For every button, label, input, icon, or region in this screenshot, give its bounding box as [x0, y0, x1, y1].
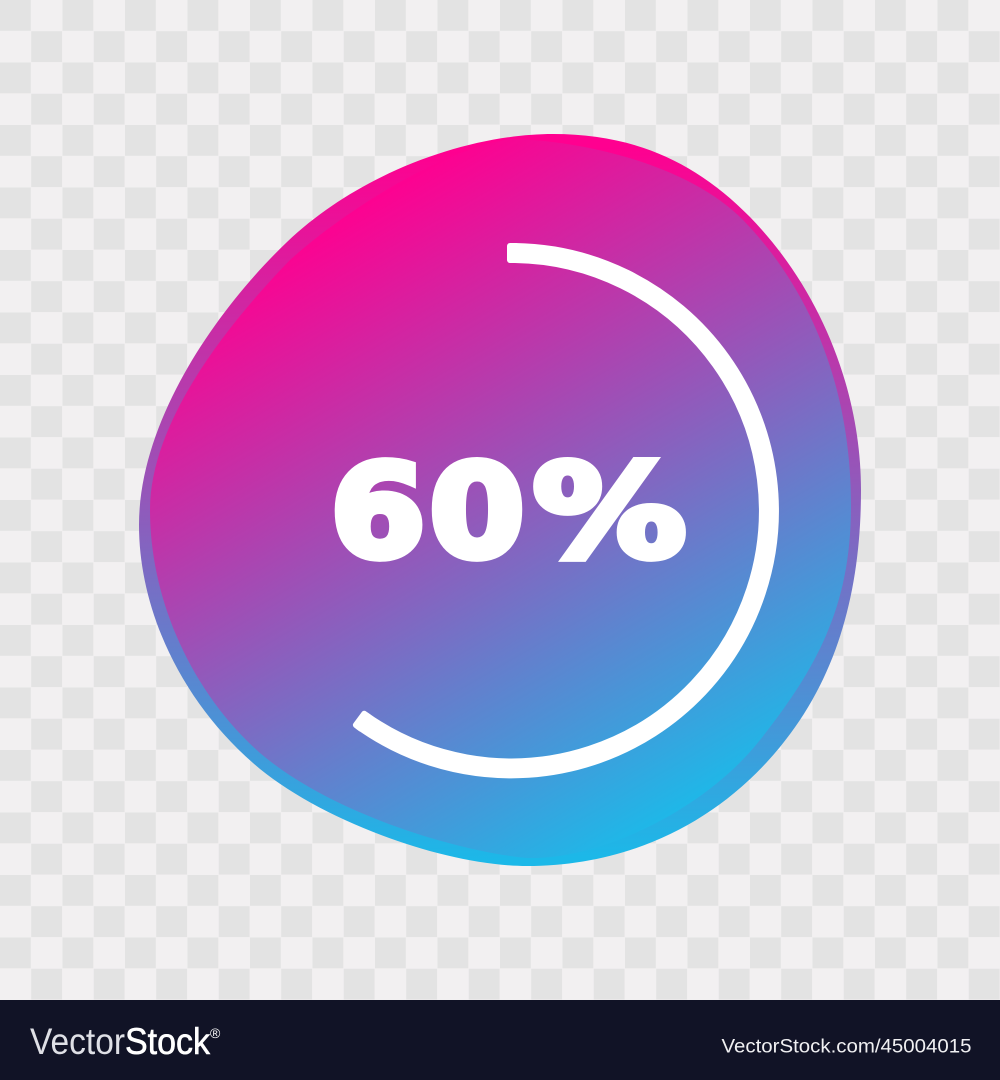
footer logo: VectorStock: ®: [210, 1025, 221, 1041]
percentage label: 0: [430, 438, 524, 587]
percentage label: [330, 438, 686, 587]
gradient blob badge: [139, 134, 861, 866]
footer logo: VectorStock: Vector: [30, 1021, 125, 1062]
blob outer layer: [139, 134, 861, 866]
percentage label: 6: [330, 438, 426, 587]
percentage label: %: [533, 438, 686, 587]
footer image id: VectorStock.com/45004015: [722, 1037, 972, 1058]
blob inner layer: [150, 139, 851, 858]
progress ring: 60 percent arc: [352, 243, 769, 768]
footer logo: VectorStock: Stock: [125, 1021, 210, 1062]
footer bar: [0, 1000, 1000, 1080]
footer logo: VectorStock: [30, 1021, 221, 1062]
